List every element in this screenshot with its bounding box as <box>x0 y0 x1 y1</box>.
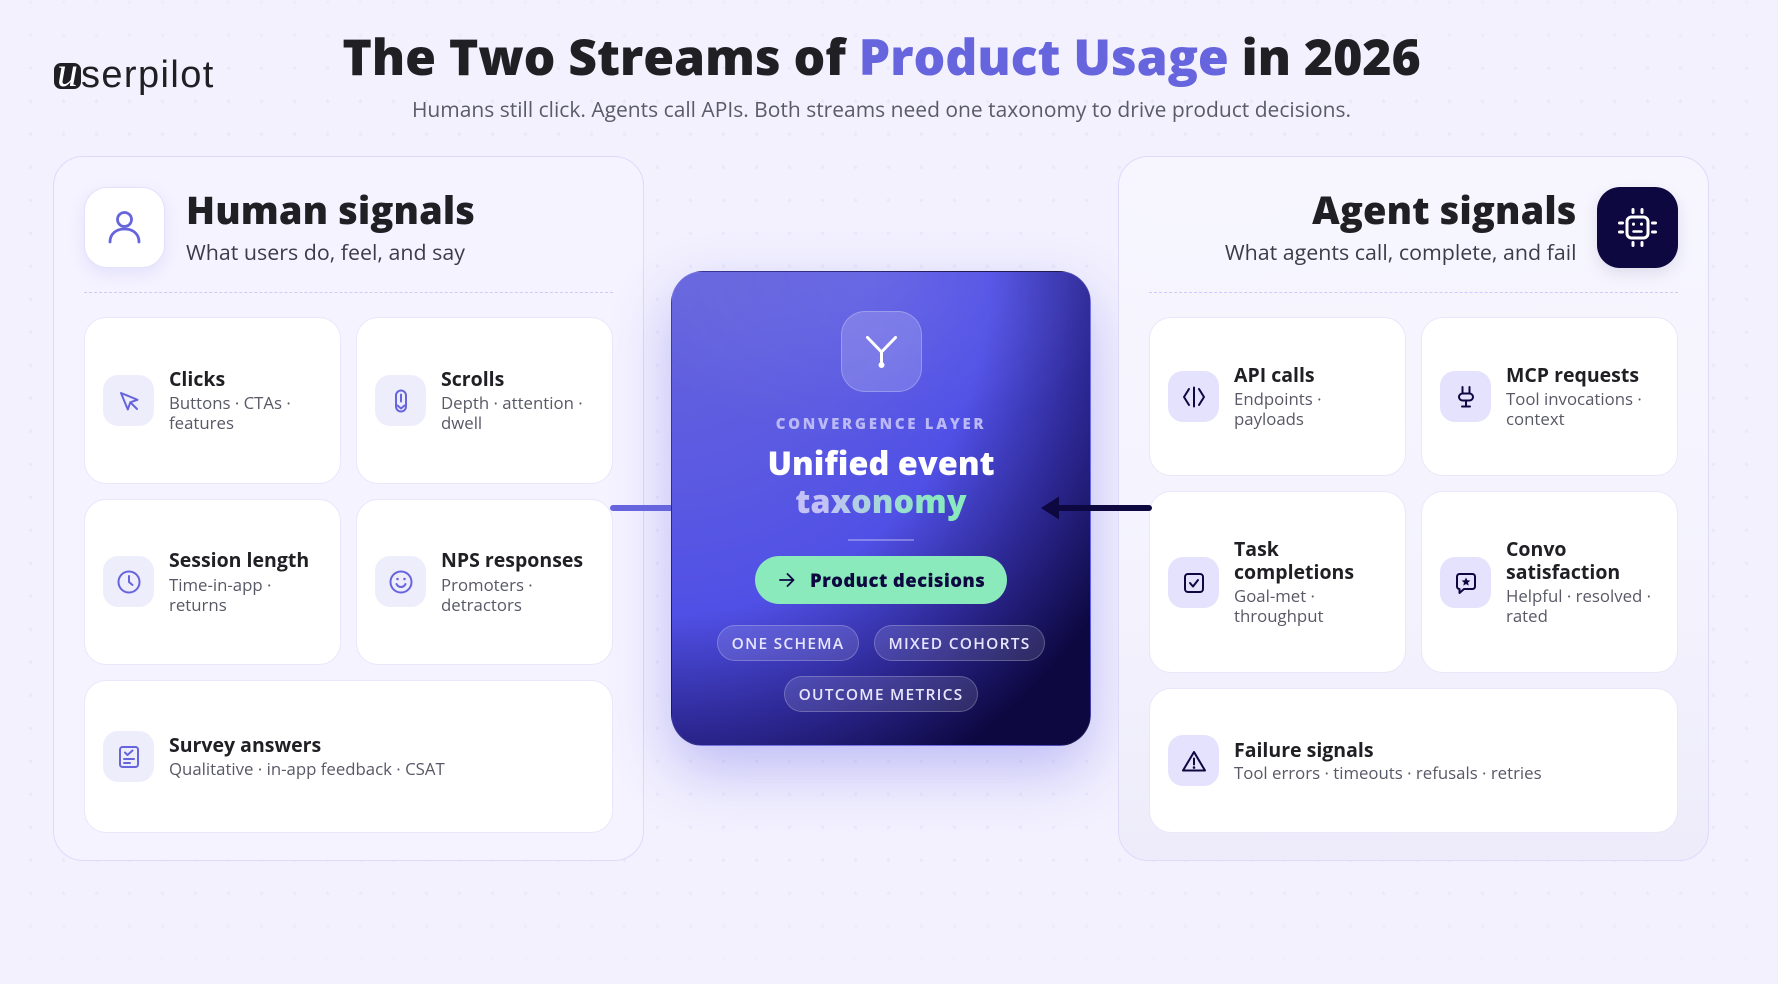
text: failure signals: Failure signals <box>1234 736 1374 762</box>
chip: one schema: ONE SCHEMA <box>732 632 844 654</box>
text: task completions <box>1234 534 1354 584</box>
card: session length <box>84 499 341 665</box>
card: survey answers: Qualitative · in-app feedback · CSAT <box>169 757 445 780</box>
pill: product decisions: Product decisions <box>810 568 985 593</box>
card: failure signals: Tool errors · timeouts · refusals · retries <box>1234 761 1542 784</box>
icon: plug <box>1440 371 1491 422</box>
icon: code <box>1168 371 1219 422</box>
icon: warning <box>1168 735 1219 786</box>
heading: unified event taxonomy <box>767 440 995 523</box>
chip: outcome metrics: OUTCOME METRICS <box>799 683 963 705</box>
title: The Two Streams of Product Usage in 2026 <box>342 22 1421 90</box>
card: clicks: features <box>169 411 234 434</box>
card: task completions: throughput <box>1234 604 1323 627</box>
card: convo satisfaction <box>1421 491 1678 673</box>
icon: cursor <box>103 375 154 426</box>
card: scrolls: dwell <box>441 411 482 434</box>
text: convo satisfaction <box>1506 534 1620 584</box>
text: scrolls: Scrolls <box>441 364 504 392</box>
text: task completions: completions <box>1234 558 1354 584</box>
panel: human signals <box>53 156 644 861</box>
chip: one schema <box>717 625 859 661</box>
card: scrolls <box>356 317 613 484</box>
text: session length: Session length <box>169 546 309 572</box>
arrow: human stream into center <box>610 505 671 511</box>
icon: survey <box>103 731 154 782</box>
card: survey answers <box>84 680 613 833</box>
card: clicks <box>84 317 341 484</box>
card: scrolls: Depth · attention · <box>441 391 583 414</box>
text: convo satisfaction: Convo <box>1506 534 1566 562</box>
panel: convergence layer <box>671 271 1091 746</box>
group: human signal cards <box>84 317 613 833</box>
subheading: agent signals: What agents call, complete, and fail <box>1225 238 1576 267</box>
card: api calls: Endpoints · <box>1234 387 1322 410</box>
card: mcp requests: Tool invocations · <box>1506 387 1642 410</box>
text: convo satisfaction: satisfaction <box>1506 558 1620 584</box>
icon: clock <box>103 556 154 607</box>
text: mcp requests: MCP requests <box>1506 360 1639 388</box>
card: nps responses: detractors <box>441 593 522 616</box>
card: api calls <box>1149 317 1406 476</box>
card: mcp requests <box>1421 317 1678 476</box>
card: clicks: Buttons · CTAs · <box>169 391 291 414</box>
card: convo satisfaction: rated <box>1506 604 1548 627</box>
logo: userpilot: serpilot <box>81 54 215 96</box>
text: task completions: Task <box>1234 534 1279 562</box>
subtitle: Humans still click. Agents call APIs. Both streams need one taxonomy to drive product decisions. <box>412 96 1351 124</box>
chip: outcome metrics <box>784 676 978 712</box>
panel: agent signals <box>1118 156 1709 861</box>
icon: message star <box>1440 557 1491 608</box>
group: agent signal cards <box>1149 317 1678 832</box>
pill: product decisions <box>755 556 1007 604</box>
icon: smile <box>375 556 426 607</box>
card: task completions: Goal-met · <box>1234 584 1315 607</box>
heading: human signals: Human signals <box>186 184 475 236</box>
text: nps responses: NPS responses <box>441 546 583 572</box>
card: api calls: payloads <box>1234 407 1304 430</box>
card: failure signals <box>1149 688 1678 833</box>
arrow: agent stream into center <box>1041 496 1152 520</box>
card: nps responses: Promoters · <box>441 573 533 596</box>
card: nps responses <box>356 499 613 665</box>
text: survey answers: Survey answers <box>169 731 321 758</box>
card: session length: Time-in-app · <box>169 573 271 596</box>
heading: agent signals: Agent signals <box>1312 184 1576 236</box>
text: api calls: API calls <box>1234 360 1315 388</box>
chip: mixed cohorts: MIXED COHORTS <box>888 632 1030 654</box>
heading: unified event taxonomy: Unified event <box>767 440 995 485</box>
eyebrow: convergence layer: CONVERGENCE LAYER <box>776 414 986 434</box>
card: mcp requests: context <box>1506 407 1565 430</box>
chip: mixed cohorts <box>874 625 1045 661</box>
card: session length: returns <box>169 593 227 616</box>
icon: check square <box>1168 557 1219 608</box>
heading: unified event taxonomy: taxonomy <box>795 478 967 523</box>
subheading: human signals: What users do, feel, and say <box>186 238 465 267</box>
icon: scroll mouse <box>375 375 426 426</box>
card: convo satisfaction: Helpful · resolved · <box>1506 584 1651 607</box>
icon: agent chip <box>1596 186 1678 268</box>
icon: converge <box>841 311 922 392</box>
icon: person <box>84 186 165 268</box>
card: task completions <box>1149 491 1406 673</box>
logo: userpilot: u <box>57 50 78 96</box>
text: clicks: Clicks <box>169 364 225 392</box>
